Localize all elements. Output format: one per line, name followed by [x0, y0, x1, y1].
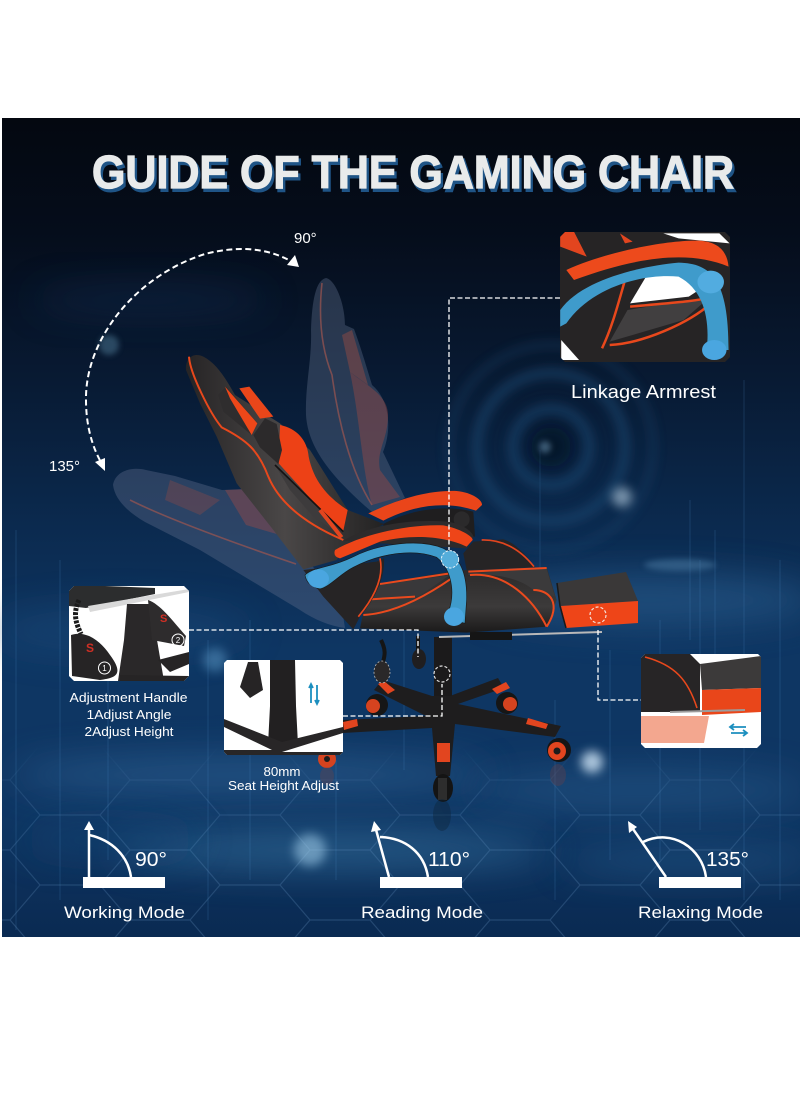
- inset: linkage armrest: [560, 232, 730, 362]
- title: GUIDE OF THE GAMING CHAIR: [94, 149, 736, 201]
- inset: adjustment handle: [69, 586, 189, 681]
- marker: seat height: [434, 666, 450, 682]
- label: relaxing mode: Relaxing Mode: [638, 903, 763, 922]
- leader line: adjustment handle: [189, 630, 418, 657]
- backrest shell: [186, 355, 384, 569]
- icon: working mode 90 degrees: 90°: [135, 849, 167, 871]
- highlighted armrest linkage: [305, 543, 467, 626]
- near armrest: [334, 521, 473, 558]
- backrest piping: [189, 357, 343, 540]
- icon: reading mode 110 degrees: 110°: [428, 849, 470, 871]
- label: adjustment handle: [70, 691, 188, 739]
- footrest: [557, 572, 638, 628]
- icon: working mode 90 degrees: [83, 821, 167, 888]
- inset: adjustment handle: 2: [176, 636, 181, 645]
- chair base and casters: [318, 632, 602, 831]
- label: 90 degrees: 90°: [294, 230, 317, 247]
- label: seat height adjust: 80mm: [264, 765, 300, 779]
- inset: seat height adjust: [224, 660, 344, 755]
- ghost chair: reclined 135 degree position: [113, 469, 345, 628]
- ghost chair: upright 90 degree position: [306, 278, 405, 512]
- seat cushion: [360, 539, 557, 633]
- leader line: armrest: [449, 298, 560, 550]
- label: seat height adjust: [228, 765, 340, 793]
- chair body: [186, 355, 557, 633]
- label: adjustment handle: 2Adjust Height: [84, 725, 174, 739]
- chair: [186, 355, 638, 831]
- label: adjustment handle: 1Adjust Angle: [86, 708, 172, 722]
- backrest orange panel: [279, 425, 348, 531]
- inset: adjustment handle: S: [86, 641, 94, 655]
- title: GUIDE OF THE GAMING CHAIR: [92, 146, 734, 198]
- label: adjustment handle: Adjustment Handle: [70, 691, 188, 705]
- far armrest: [368, 491, 482, 537]
- inset: adjustment handle: S: [160, 613, 167, 625]
- leader line: seat height: [343, 684, 442, 716]
- label: seat height adjust: Seat Height Adjust: [228, 779, 340, 793]
- backrest quilted centre: [275, 465, 343, 537]
- icon: reading mode 110 degrees: [371, 821, 470, 888]
- inset: extendable footrest: [641, 654, 761, 748]
- label: linkage armrest: Linkage Armrest: [571, 381, 716, 402]
- lower back side: [303, 558, 384, 629]
- background panel: [0, 118, 800, 937]
- inset: adjustment handle: 1: [102, 664, 107, 673]
- icon: relaxing mode 135 degrees: [628, 821, 749, 888]
- label: reading mode: Reading Mode: [361, 903, 483, 922]
- label: working mode: Working Mode: [64, 903, 185, 922]
- headrest pillows: [218, 387, 282, 464]
- leader line: footrest: [598, 630, 641, 700]
- label: 135 degrees: 135°: [49, 458, 80, 475]
- arrow: recline range arc: [86, 249, 299, 471]
- icon: relaxing mode 135 degrees: 135°: [706, 849, 749, 871]
- marker: footrest: [590, 607, 606, 623]
